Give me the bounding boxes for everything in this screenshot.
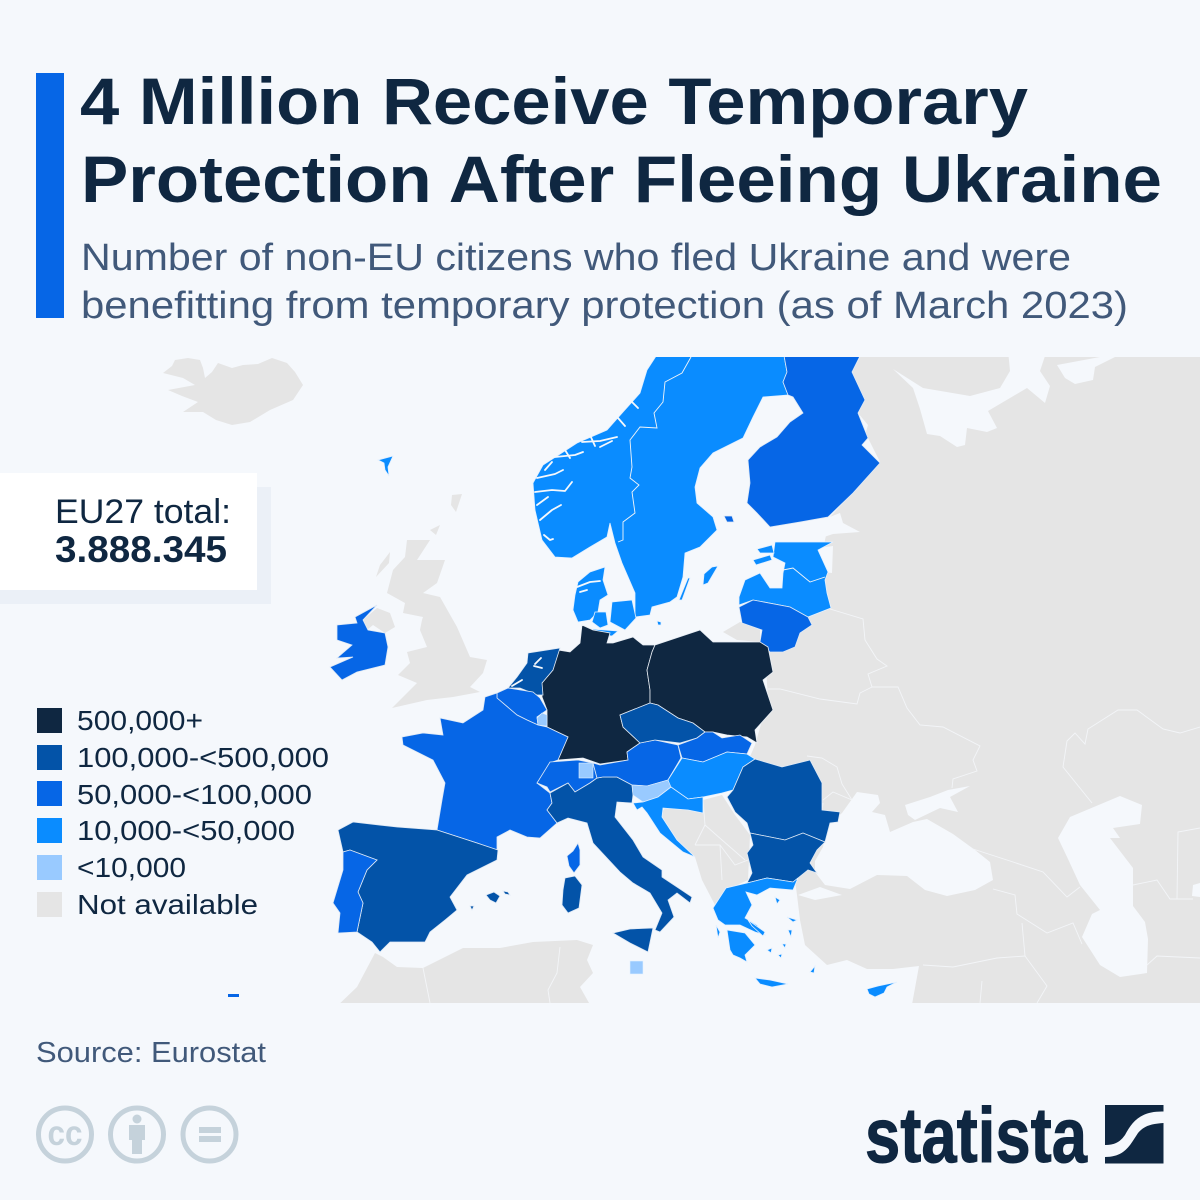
legend item: <10,000: <10,000 — [77, 852, 186, 883]
Sicily — [613, 928, 653, 952]
Cyprus — [867, 982, 897, 997]
Estonia-Latvia border — [783, 568, 825, 582]
Western Balkans borders — [695, 800, 748, 880]
Great Britain — [387, 540, 487, 708]
Bulgaria — [747, 833, 825, 883]
Ireland — [330, 605, 388, 680]
subtitle: Number of non-EU citizens who fled Ukraine and were — [81, 237, 1071, 279]
North Africa borders — [423, 947, 560, 1003]
France — [402, 693, 568, 850]
Spain — [338, 822, 498, 952]
Gulf of Finland — [826, 513, 860, 536]
Caspian Sea — [1058, 796, 1148, 977]
legend item: 100,000-<500,000: 100,000-<500,000 — [77, 742, 329, 773]
Denmark — [573, 567, 636, 636]
Aland — [724, 516, 734, 522]
Croatia — [633, 787, 703, 857]
Black Sea — [815, 792, 993, 896]
statista wordmark: statista — [865, 1091, 1087, 1179]
legend item: 10,000-<50,000: 10,000-<50,000 — [77, 815, 295, 846]
callout: EU27 total: 3.888.345 — [55, 529, 227, 570]
legend item: 50,000-<100,000: 50,000-<100,000 — [77, 779, 312, 810]
statista logo mark — [1105, 1105, 1164, 1164]
Germany — [542, 625, 655, 764]
Sea of Marmara — [798, 887, 842, 900]
Belgium — [497, 688, 547, 725]
legend item: <10,000 — [37, 852, 186, 883]
callout: EU27 total: EU27 total: — [55, 493, 231, 531]
Corsica — [567, 843, 580, 873]
Italy — [547, 777, 692, 932]
Slovenia — [632, 780, 671, 802]
Madeira — [228, 994, 239, 997]
Malta marker — [630, 961, 643, 974]
Hungary — [668, 752, 755, 799]
icon: no derivatives — [183, 1108, 236, 1161]
Lithuania — [739, 600, 812, 652]
Norway and Sweden — [533, 350, 788, 617]
legend — [37, 705, 329, 920]
Kaliningrad — [723, 622, 760, 642]
Gotland — [703, 566, 718, 585]
Faroe Islands — [378, 456, 393, 476]
Slovakia — [678, 732, 752, 762]
icon: creative commons: cc — [48, 1114, 82, 1153]
non-EU borders — [768, 609, 1200, 1003]
title accent bar — [36, 73, 64, 318]
Barents Sea inlet — [1057, 357, 1115, 384]
Balearic Islands — [470, 891, 510, 910]
Netherlands — [508, 648, 560, 695]
Sea of Azov — [905, 786, 970, 820]
callout: EU27 total — [0, 473, 257, 590]
subtitle: benefitting from temporary protection (as of March 2023) — [81, 285, 1128, 327]
Poland — [647, 630, 773, 743]
Finland — [747, 350, 880, 527]
Northern Ireland — [363, 608, 395, 633]
subtitle — [81, 237, 1128, 327]
source: Source: Eurostat — [36, 1037, 266, 1069]
map of Europe — [163, 350, 1200, 1010]
Lake Peipus — [822, 546, 833, 573]
Sardinia — [562, 876, 582, 913]
IJsselmeer — [512, 658, 542, 686]
Switzerland — [537, 760, 597, 792]
title: 4 Million Receive Temporary — [80, 64, 1028, 138]
Estonian islands — [753, 545, 774, 565]
Norwegian fjords — [535, 400, 638, 540]
non-EU land: Russia, Eastern Europe, Turkey and Middle East — [740, 350, 1200, 1010]
legend item: 500,000+ — [37, 705, 203, 736]
Bornholm — [657, 621, 661, 625]
icon: creative commons — [38, 1108, 92, 1161]
White Sea — [893, 350, 1050, 447]
Liechtenstein marker — [579, 763, 593, 778]
Greece — [713, 878, 815, 987]
Estonia and Latvia — [739, 542, 833, 617]
Scottish islands — [376, 494, 462, 577]
North Africa — [340, 940, 593, 1003]
Western Balkans (no data) — [660, 795, 750, 905]
legend item: not available: Not available — [77, 889, 258, 920]
callout shadow — [0, 487, 271, 604]
icon: attribution — [110, 1108, 164, 1161]
Romania — [727, 759, 840, 842]
Luxembourg — [537, 713, 547, 726]
Oland — [679, 578, 690, 600]
Czechia — [620, 703, 705, 743]
legend item: 500,000+: 500,000+ — [77, 705, 203, 736]
Portugal — [333, 850, 377, 933]
Aral Sea — [1192, 883, 1200, 897]
Iceland — [163, 358, 303, 425]
Norway-Sweden border — [618, 357, 691, 542]
Austria — [593, 740, 681, 786]
title — [80, 64, 1162, 216]
title: Protection After Fleeing Ukraine — [81, 142, 1162, 216]
